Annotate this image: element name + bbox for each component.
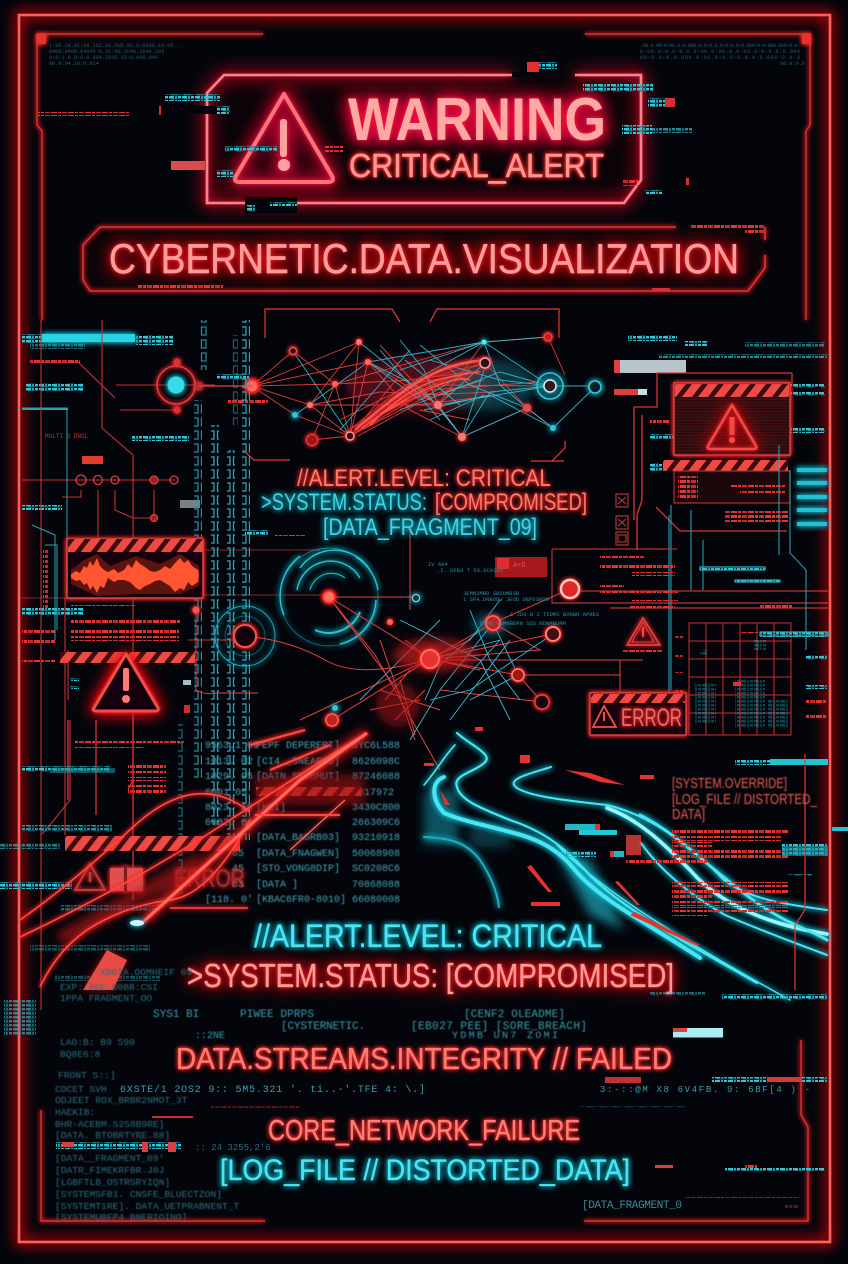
left log list: [SYSTEMSFB1. CNSFE_BLUECTZON]: [55, 1189, 222, 1200]
data fragment label: [DATA_FRAGMENT_0: [582, 1200, 682, 1212]
side icons: [616, 494, 628, 545]
log row glitch: [56, 1077, 827, 1171]
grey notes: 1 JDS.B 2 TIDMS BONBR APRES: [510, 611, 600, 618]
corner tiny text: [49, 43, 805, 67]
table of fragments: 93210918: [352, 833, 400, 844]
right panel wiring: [634, 373, 792, 550]
scattered cyan log text: ::2NE: [195, 1031, 225, 1042]
white hot spot: [130, 920, 144, 926]
scattered cyan log text: [153, 1009, 587, 1042]
hazard strip: [60, 652, 195, 663]
left log list: COCET SVH: [55, 1084, 107, 1095]
hazard stripes: [68, 539, 203, 552]
red text block under triangle: [74, 741, 184, 793]
error text: ERROR: [621, 704, 682, 732]
info panel lines: [552, 549, 677, 603]
info text rows: [622, 632, 760, 693]
scattered cyan log text: SYS1 BI: [153, 1009, 199, 1021]
error hazard stripes: [591, 694, 685, 703]
table of fragments: 70868088: [352, 880, 400, 891]
table of fragments: 50068908: [352, 849, 400, 860]
scattered cyan log text: YDMB UN7 ZOMI: [452, 1031, 558, 1042]
left column glitch and wires: [20, 320, 330, 1010]
system override note: DATA]: [672, 806, 705, 823]
waveform: [71, 558, 199, 593]
warning heading: WARNING: [348, 86, 606, 153]
table of fragments: [HEI]: [256, 802, 286, 814]
left log list: XNOTA.OOMHEIF 69: [100, 967, 192, 978]
corner tiny text: 00.0:04.20:0:014: [49, 61, 99, 67]
banner glitch: [138, 224, 765, 291]
table of fragments: 8023. 18: [205, 803, 253, 814]
grid noise: [694, 640, 788, 728]
cyan wires: [22, 408, 67, 640]
sector label: [725, 511, 788, 522]
warning panel: [38, 62, 692, 213]
error box: [590, 693, 686, 735]
icon: warning triangle: [235, 94, 333, 182]
warning panel fill: [207, 75, 641, 203]
log file heading: [LOG_FILE // DISTORTED_DATA]: [220, 1154, 630, 1187]
icon: faded warning triangle: [75, 864, 105, 890]
table of fragments: PEPF DEPERERT]: [256, 740, 340, 752]
hazard strip with warning sign: [60, 652, 195, 711]
table of fragments: 6082. C6: [205, 818, 253, 829]
waveform panel: [67, 539, 203, 598]
left data fragments: MULTI G DNSL: [45, 433, 89, 440]
red data streaks: [20, 730, 367, 990]
left log list: [DATA. BTOBRTYRE.88]: [55, 1130, 170, 1141]
red tag: A+D: [513, 562, 526, 570]
system override note: [SYSTEM.OVERRIDE]: [672, 775, 787, 792]
cyan core: [168, 376, 184, 394]
connector to first node: [199, 385, 252, 387]
table of fragments: SC0208C6: [352, 864, 400, 875]
red tag: [495, 557, 547, 577]
alert level heading cyan: //ALERT.LEVEL: CRITICAL: [254, 918, 602, 954]
table of fragments: 8626098C: [352, 757, 400, 768]
cyan nodes: [292, 339, 601, 431]
mid wires: [243, 441, 565, 461]
small cyan node: [332, 594, 420, 711]
table of fragments: 66080008: [352, 895, 400, 906]
table of fragments: 45: [232, 864, 244, 875]
network bracket: [265, 309, 559, 338]
glitch block: [110, 866, 143, 892]
title text: CYBERNETIC.DATA.VISUALIZATION: [109, 235, 739, 282]
cyan red glitch fragments: [565, 824, 676, 863]
lower nodes: [192, 580, 579, 726]
left log list: LAO:B: B9 S90: [60, 1037, 135, 1048]
network nodes: [246, 333, 552, 446]
data streams integrity heading: DATA.STREAMS.INTEGRITY // FAILED: [176, 1041, 672, 1076]
table of fragments: 266309C6: [352, 818, 400, 829]
table of fragments: 1013. 02: [205, 757, 253, 768]
waveform frame: [67, 539, 203, 598]
lower links: [196, 530, 828, 770]
log row glitch: 6XSTE/1 2OS2 9:: 5M5.321 '. ti..-'.TFE 4: \.]: [120, 1084, 425, 1096]
table hazard strip: [256, 787, 361, 796]
stream glow area: [424, 790, 624, 930]
grey notes: .I. DFB3 T 50.0C0100: [437, 567, 503, 574]
scattered cyan log text: [CENF2 OLEADME]: [464, 1009, 565, 1021]
system override note: [672, 775, 817, 823]
table of fragments: 87246088: [352, 772, 400, 783]
corner tiny text: 0:0:1.0.0:0.0.004.2045.20:0.046.046: [49, 55, 158, 61]
left data fragments: [22, 334, 305, 713]
left log list: BQ8E6:8: [60, 1049, 101, 1060]
second hazard strip: [663, 460, 788, 471]
corner tiny text: 0400:0400.04045:0.01:00.2040.2046.203: [49, 49, 164, 55]
data columns: [178, 320, 250, 894]
left log list: [LGBFTLB_OSTRSRYIQN]: [55, 1177, 170, 1188]
table of fragments: [DATN SRSBMUT]: [256, 771, 340, 783]
warning panel border: [207, 75, 641, 203]
corner tiny text: 00:0.0:0.0.000 0:00.0:0.0:0.0.0:0.000:0.0:0: [640, 55, 800, 61]
red streak glow: [60, 733, 367, 990]
log row glitch: :: 24 3255,2'6: [195, 1143, 271, 1153]
scattered cyan log text: [EB027 PEE] [SORE_BREACH]: [411, 1021, 587, 1033]
middle data fragment: [DATA_FRAGMENT_09]: [323, 514, 537, 541]
grey notes: 1 SPA.DRBODW JEOD DEPOSBOD: [463, 596, 550, 603]
table of fragments: [118. 0': [205, 894, 253, 906]
left wires: [20, 320, 330, 1010]
left log list: [DATR_FIMEKRFBR.J8J: [55, 1165, 164, 1176]
grey notes: IV A04: [428, 561, 449, 568]
info panel: [428, 549, 792, 693]
table of fragments: 63: [232, 880, 244, 891]
waveform envelope: [71, 554, 199, 596]
left log list: EXP: ACE.G0BB:CSI: [60, 982, 158, 993]
scattered cyan log text: PIWEE DPRPS: [240, 1009, 314, 1021]
icon: warning triangle left: [93, 654, 158, 711]
right bars: [735, 759, 848, 876]
critical alert subheading: CRITICAL_ALERT: [349, 147, 604, 184]
upper network graph: [246, 333, 601, 446]
upper right glitch chip: [650, 992, 827, 1038]
corner tiny text: 1:00.CH.01:00.2S2.01.FWD.9S.8:0000.10:05 ..: [49, 43, 183, 49]
system status heading red: >SYSTEM.STATUS: [COMPROMISED]: [187, 957, 674, 994]
grid lines: [689, 623, 791, 735]
table of fragments: [DATA ]: [256, 879, 298, 891]
corner tiny text: .00.0 00:0:00.0:0.000:0.0:0.0.0:0:0.0:0.000:0.0:000.000:0.0:: [640, 43, 800, 49]
error frame: [590, 693, 686, 735]
table of fragments: [KBAC6FR0-8010]: [256, 894, 346, 906]
table of fragments: 8YC6L588: [352, 741, 400, 752]
core network failure heading: CORE_NETWORK_FAILURE: [268, 1115, 580, 1147]
grid red chip: [733, 682, 741, 686]
table of fragments: 3430C800: [352, 803, 400, 814]
red log blocks: [672, 830, 788, 916]
icon: warning triangle right: [708, 405, 756, 449]
red data stream: [355, 360, 490, 430]
cyan glitch bar: [42, 334, 135, 342]
cyan glitch left: [0, 766, 160, 1035]
cyan data streams: [424, 727, 848, 1000]
table of fragments: 85: [232, 849, 244, 860]
log row glitch: 3:-::@M X8 6V4FB. 9: 6BF[4 ) -: [600, 1085, 810, 1095]
top right fragments: [614, 335, 828, 471]
radar rings: [215, 548, 378, 666]
table of fragments: [DATA_BAGRB03]: [256, 832, 340, 844]
left log list: HAEKIB:: [55, 1107, 95, 1118]
cyan status bars: [797, 468, 827, 526]
red stream fragments: [424, 727, 700, 945]
table of fragments: 9563.1 09: [205, 741, 259, 752]
right strip fragments: [760, 633, 827, 718]
middle compromised: [COMPROMISED]: [435, 489, 587, 516]
grey notes: JEMN3MRD SBSUMB3B: [463, 590, 520, 597]
middle alert level: //ALERT.LEVEL: CRITICAL: [297, 465, 551, 492]
corner tiny text: 0:00.0:0.0:0.0.0:00.0:00:0.0:00.0:0:0.0:0.000: [640, 49, 800, 55]
table of fragments: [205, 740, 400, 906]
scattered cyan log text: [CYSTERNETIC.: [281, 1021, 365, 1033]
right alert panel: [616, 373, 828, 693]
lower red cluster: [376, 615, 508, 727]
title banner: [83, 224, 765, 291]
table of fragments: 6001 05: [205, 788, 247, 799]
info text: [600, 556, 792, 610]
hazard stripes: [675, 384, 789, 397]
network haze: [345, 357, 535, 413]
grey notes: [428, 561, 600, 627]
small warning sign: [627, 618, 660, 645]
corner tiny text: 00:0:0.0: [780, 61, 805, 67]
cyan verticals: [669, 445, 828, 693]
title banner border: [83, 227, 765, 291]
left log list: 1PPA FRAGMENT_OO: [60, 993, 152, 1004]
left log list: [DATA__FRAGMENT_09': [55, 1153, 164, 1164]
table of fragments: [STO_VONG8DIP]: [256, 863, 340, 875]
table of fragments: [DATA_FNAGWEN]: [256, 848, 340, 860]
grid panel: [689, 623, 827, 735]
right panel body: [674, 383, 790, 455]
title banner fill: [83, 227, 765, 291]
lower right panel: [674, 471, 790, 503]
network links: [252, 337, 565, 440]
middle text lines under the network: [261, 465, 587, 541]
target cluster: [157, 358, 203, 414]
red wedge: [83, 950, 127, 990]
stream lines: [424, 733, 827, 1000]
hazard strip: [65, 836, 240, 851]
left log list: [SYSTEMUBFP4 BNERIOINO]: [55, 1212, 187, 1223]
left log list: [SYSTEMT1RE]. DATA_UETPRABNENT_T: [55, 1201, 239, 1212]
bottom left red wires: [68, 715, 133, 900]
grey notes: OTMN OSMNBEMN SDS.NDNMBDRM: [480, 620, 566, 627]
table of fragments: 1029. 05: [205, 772, 253, 783]
table of fragments: 7817972: [352, 788, 394, 799]
table of fragments: [CI4__SNEARG6]: [256, 756, 340, 768]
left log list: [55, 967, 239, 1223]
middle system status: >SYSTEM.STATUS:: [261, 489, 427, 516]
left log list: BHR-ACEBM.S2S8B9RE]: [55, 1119, 164, 1130]
warning panel glitch fragments: [38, 62, 692, 213]
red streak lines: [20, 730, 367, 987]
third hazard strip with error: [65, 787, 361, 893]
left log list: FRONT S::]: [58, 1070, 116, 1081]
faded error label: ERROR: [174, 865, 245, 893]
bottom right tiny red marks: [685, 1197, 800, 1209]
left log list: ODJEET ROX_BRBR2NMOT_3T: [55, 1095, 188, 1106]
small connector nodes: [76, 475, 178, 522]
icon: error triangle: [593, 706, 616, 727]
lower data network: [192, 530, 828, 770]
right red wire: [795, 754, 805, 990]
